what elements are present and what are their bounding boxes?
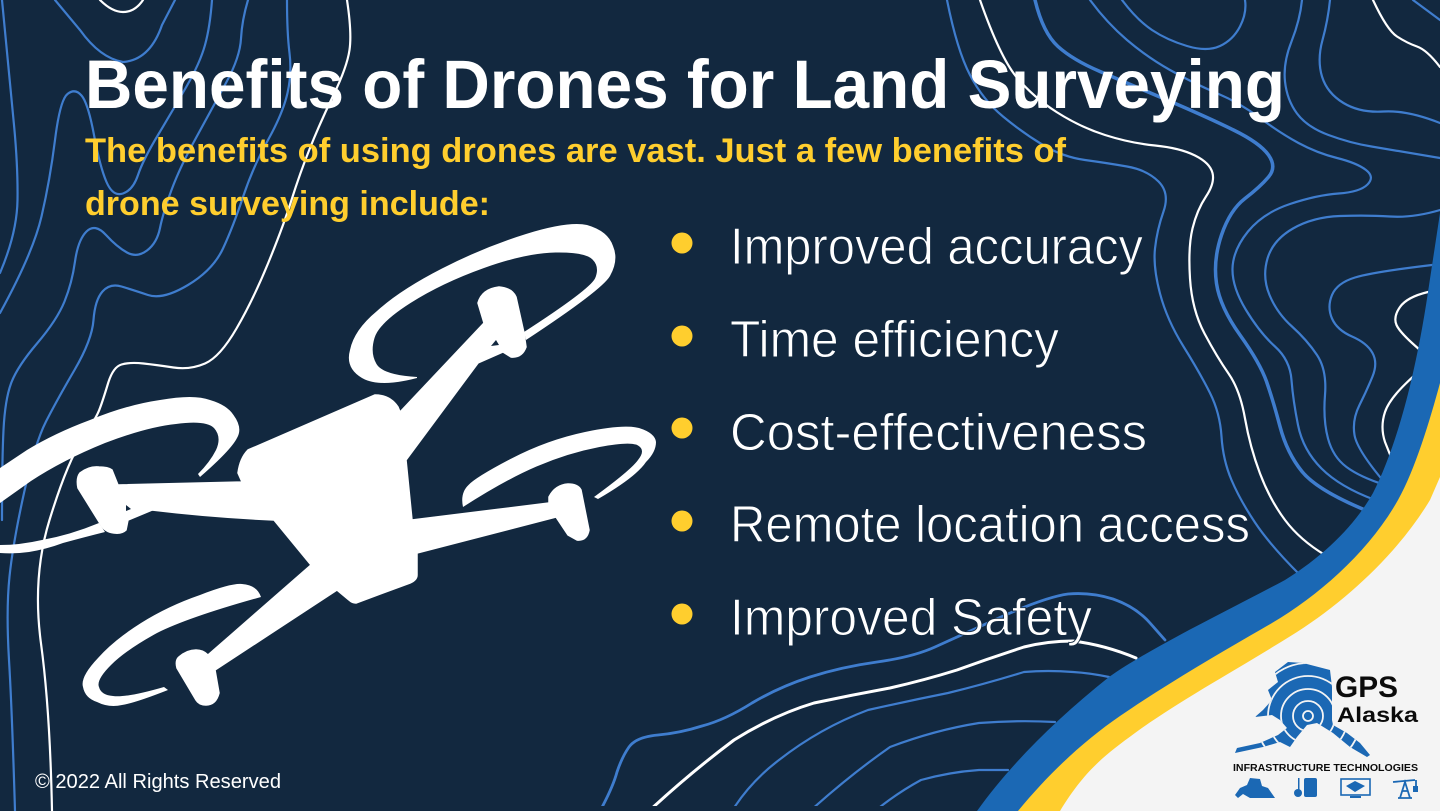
drone body and arms	[77, 287, 589, 705]
contour lines: bottom	[600, 594, 1165, 811]
rotor: top right	[349, 224, 615, 383]
logo icon: total station	[1294, 778, 1317, 797]
arm notch: right	[491, 340, 499, 346]
wave: yellow band	[1018, 383, 1440, 811]
bullet list	[672, 218, 1250, 647]
rotor: left lower arc	[0, 523, 105, 553]
subtitle	[85, 132, 1067, 223]
corner panel: logo background	[1060, 477, 1440, 811]
logo icon: bulldozer	[1235, 778, 1275, 798]
wave: blue band	[977, 213, 1440, 811]
rotor: bottom left	[83, 584, 261, 706]
item: cost-effectiveness: Cost-effectiveness	[730, 404, 1147, 462]
subtitle: The benefits of using drones are vast. Just a few benefits of	[85, 132, 1067, 170]
title: Benefits of Drones for Land Surveying	[85, 46, 1285, 123]
logo text: Alaska: Alaska	[1337, 704, 1418, 727]
logo icon: monitor	[1341, 779, 1370, 798]
logo map: Alaska with rings	[1235, 662, 1370, 757]
rotor: left	[0, 397, 239, 503]
rotor: right	[462, 427, 656, 507]
logo text: tagline: INFRASTRUCTURE TECHNOLOGIES	[1233, 762, 1418, 774]
contour lines: left	[0, 0, 350, 811]
item: time efficiency: Time efficiency	[730, 311, 1059, 369]
logo: GPS Alaska	[1230, 655, 1418, 798]
copyright: © 2022 All Rights Reserved	[35, 771, 281, 793]
item: improved accuracy: Improved accuracy	[730, 218, 1143, 276]
contour lines: top right	[947, 0, 1440, 575]
logo text: GPS: GPS	[1335, 671, 1398, 704]
icon: drone	[0, 224, 656, 706]
subtitle: drone surveying include:	[85, 185, 490, 223]
arm notch: left	[126, 505, 131, 511]
item: remote location access: Remote location access	[730, 496, 1250, 554]
logo icon: pump jack	[1393, 780, 1418, 798]
item: improved safety: Improved Safety	[730, 589, 1092, 647]
